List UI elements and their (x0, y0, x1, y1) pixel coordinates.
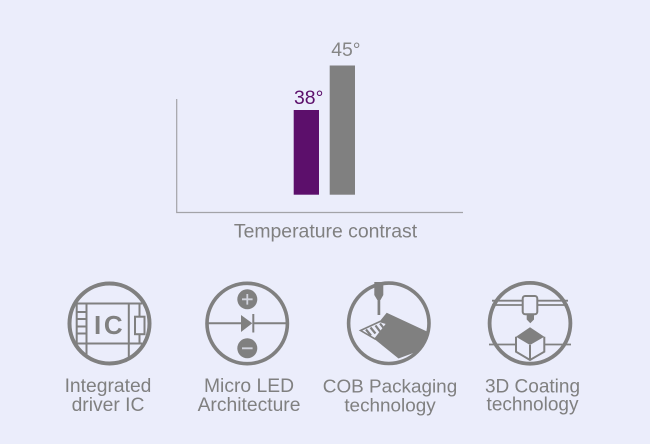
icon: integrated driver IC (70, 284, 150, 364)
label: integrated driver IC: driver IC (72, 395, 144, 416)
label: integrated driver IC: Integrated (65, 376, 151, 397)
label: COB packaging technology: technology (344, 396, 436, 416)
value label: 45 degrees: 45° (331, 39, 361, 61)
IC lettering: IC (94, 310, 125, 340)
bar: 38 degrees (294, 110, 319, 195)
chart caption: Temperature contrast (234, 220, 418, 242)
icon: COB packaging (349, 282, 429, 363)
bar chart: temperature contrast (177, 39, 463, 242)
icon: 3D coating printer (489, 283, 571, 364)
bar: 45 degrees (330, 66, 355, 195)
label: micro LED architecture: Micro LED (204, 376, 294, 397)
label: 3D coating technology: 3D Coating (485, 376, 580, 398)
icon: micro LED diode (207, 283, 287, 364)
label: micro LED architecture: Architecture (198, 395, 300, 416)
value label: 38 degrees: 38° (294, 87, 323, 109)
label: 3D coating technology: technology (487, 394, 579, 416)
chart axes (177, 99, 463, 212)
label: COB packaging technology: COB Packaging (323, 376, 457, 398)
